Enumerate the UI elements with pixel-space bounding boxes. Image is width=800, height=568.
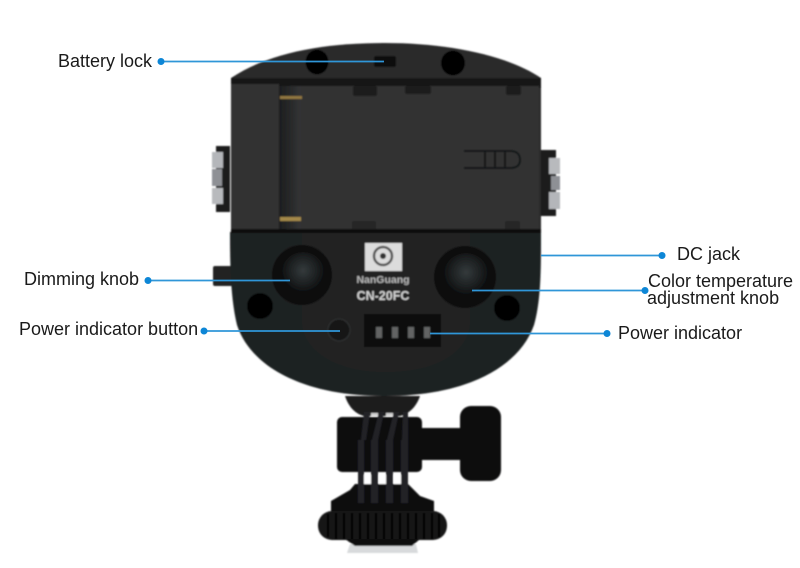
- colour temperature knob: [434, 246, 496, 308]
- callout: Power indicator: Power indicator: [618, 323, 742, 343]
- ring underside: [345, 539, 420, 546]
- lower control body: [230, 232, 541, 396]
- locking screw knob: [460, 406, 501, 481]
- knurled ring: [318, 511, 447, 540]
- left side clip: [212, 146, 230, 212]
- centre panel relief: [302, 233, 470, 372]
- battery plate body: [231, 43, 541, 232]
- callout: DC jack: [541, 244, 741, 264]
- dimming knob: [272, 245, 332, 305]
- callout: Color temperature adjustment knob: adjustment knob: [647, 288, 779, 308]
- pivot fins: [358, 412, 408, 503]
- right side clip: [541, 150, 560, 216]
- top band shadow: [231, 78, 541, 88]
- left recess shadow: [279, 86, 301, 231]
- plate notches: [352, 86, 521, 232]
- battery recess: [279, 86, 539, 232]
- lower mounting holes: [247, 293, 520, 321]
- mount neck: [345, 396, 420, 416]
- left side tab: [213, 266, 233, 286]
- left wall: [231, 84, 279, 232]
- base collar: [331, 484, 434, 512]
- brand name: NanGuang: [356, 274, 410, 286]
- top mounting holes: [306, 50, 465, 76]
- callout: Color temperature adjustment knob: Color temperature: [648, 271, 793, 291]
- callout: Power indicator button: [19, 319, 340, 339]
- gold contacts: [280, 96, 302, 221]
- callout: Battery lock: [58, 51, 384, 71]
- hot shoe mount: [318, 396, 501, 553]
- callout: DC jack: DC jack: [677, 244, 741, 264]
- camera light device: [212, 43, 560, 553]
- power indicator display: [364, 314, 441, 347]
- brand logo: [365, 243, 402, 271]
- locking screw shaft: [420, 428, 462, 460]
- power indicator button: [328, 319, 350, 341]
- metal shoe foot: [347, 544, 418, 553]
- callout: Dimming knob: [24, 269, 290, 289]
- callout: Power indicator: [430, 323, 742, 343]
- callout: Dimming knob: Dimming knob: [24, 269, 139, 289]
- callout: Power indicator button: Power indicator button: [19, 319, 198, 339]
- upper fin highlights: [371, 413, 393, 416]
- lower body top edge: [231, 229, 541, 233]
- model name: CN-20FC: [357, 289, 409, 303]
- battery latch slot: [464, 151, 520, 168]
- battery lock switch: [374, 56, 396, 67]
- callout: Color temperature adjustment knob: [472, 271, 793, 308]
- pivot barrel: [337, 417, 422, 472]
- ring ridges: [328, 513, 439, 539]
- callout: Battery lock: Battery lock: [58, 51, 153, 71]
- fin gaps: [364, 475, 401, 484]
